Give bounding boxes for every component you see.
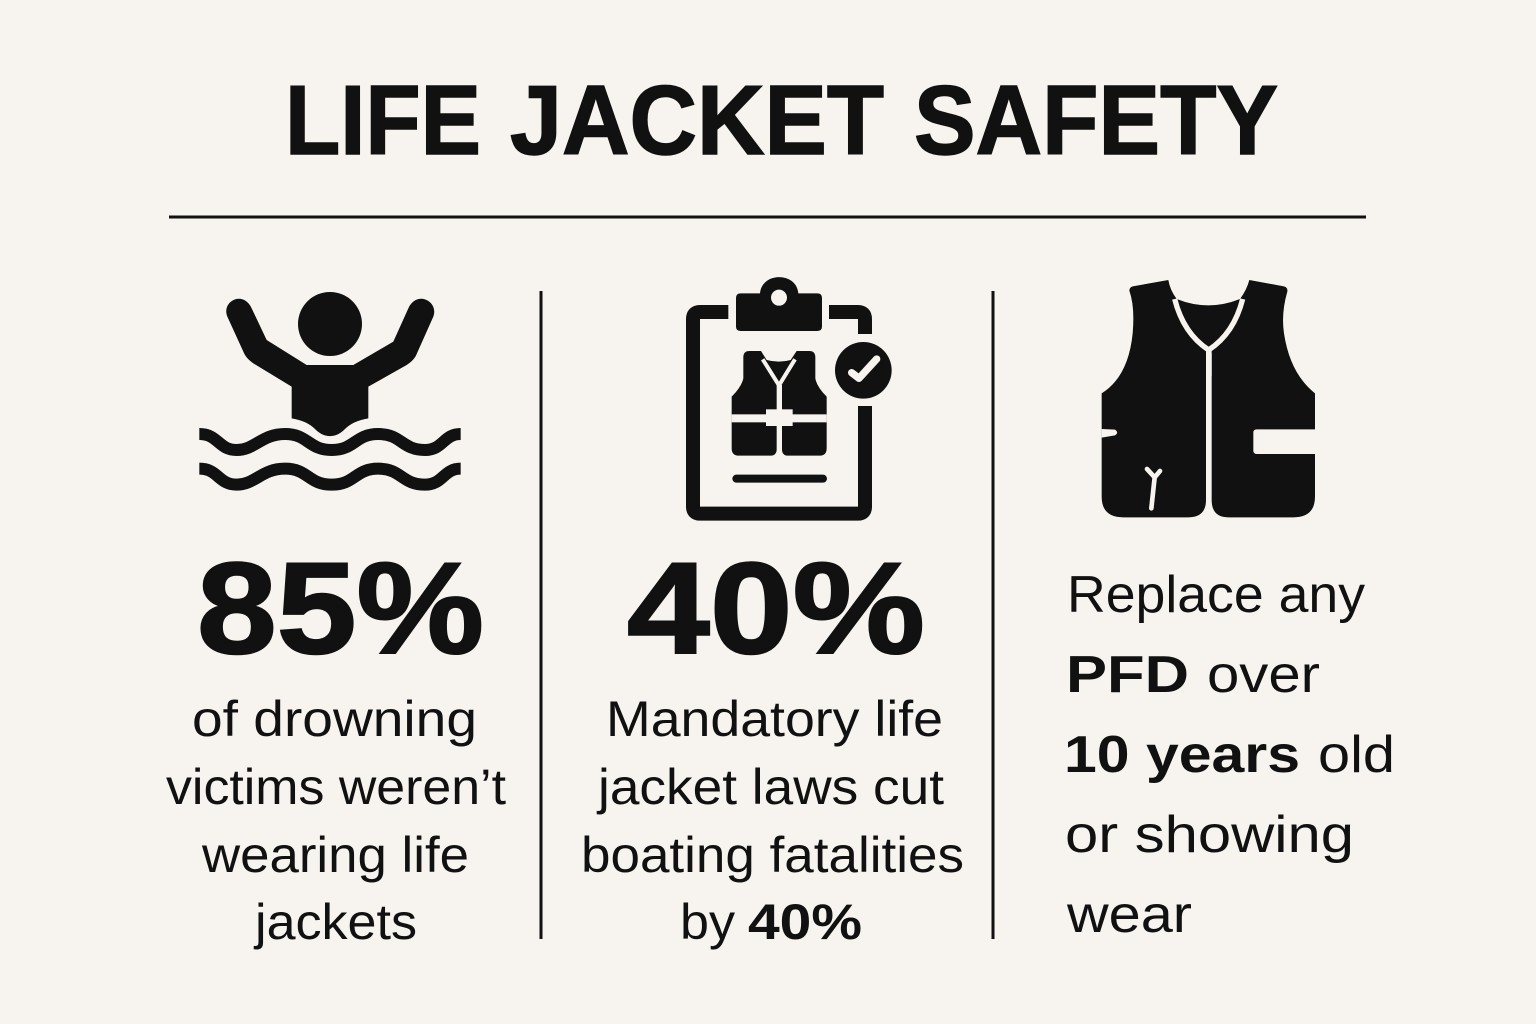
text: laws description: Mandatory life <box>606 691 943 747</box>
text: drowning description: of drowning <box>192 691 477 747</box>
text: replacement advice: 10 years <box>1064 726 1300 784</box>
check badge <box>835 342 892 399</box>
text: drowning description: victims weren’t <box>166 759 506 815</box>
clipboard frame <box>693 312 865 514</box>
text: replacement advice: over <box>1207 646 1320 704</box>
panel: mandatory laws statistic <box>581 277 964 950</box>
text: laws description: by <box>680 894 735 950</box>
text: drowning description: jackets <box>253 894 417 950</box>
text: drowning description: wearing life <box>201 827 469 883</box>
title: LIFE <box>285 65 481 175</box>
small life jacket <box>732 351 827 456</box>
text: laws description <box>581 691 964 950</box>
text: replacement advice: wear <box>1066 886 1192 944</box>
title: SAFETY <box>914 65 1278 175</box>
icon: clipboard with life jacket and check mark <box>693 277 892 514</box>
text: laws description: boating fatalities <box>581 827 964 883</box>
icon: person drowning in water <box>199 292 461 485</box>
clipboard clip <box>736 277 822 331</box>
text: replacement advice: Replace any <box>1067 566 1365 624</box>
text: replacement advice: old <box>1318 726 1395 784</box>
text: laws description: jacket laws cut <box>596 759 944 815</box>
panel: drowning statistic <box>166 292 506 950</box>
text: replacement advice <box>1064 566 1395 944</box>
title <box>285 65 1278 175</box>
text: replacement advice: or showing <box>1065 806 1354 864</box>
text: replacement advice: PFD <box>1066 646 1189 704</box>
text: laws description: 40% <box>748 894 862 950</box>
panel: replacement advice <box>1064 280 1395 944</box>
statistic: 85%: 85% <box>197 535 484 681</box>
icon: life jacket vest <box>1102 280 1316 517</box>
title: JACKET <box>510 65 884 175</box>
form line <box>732 475 827 483</box>
text: drowning description <box>166 691 506 950</box>
statistic: 40%: 40% <box>627 535 925 681</box>
